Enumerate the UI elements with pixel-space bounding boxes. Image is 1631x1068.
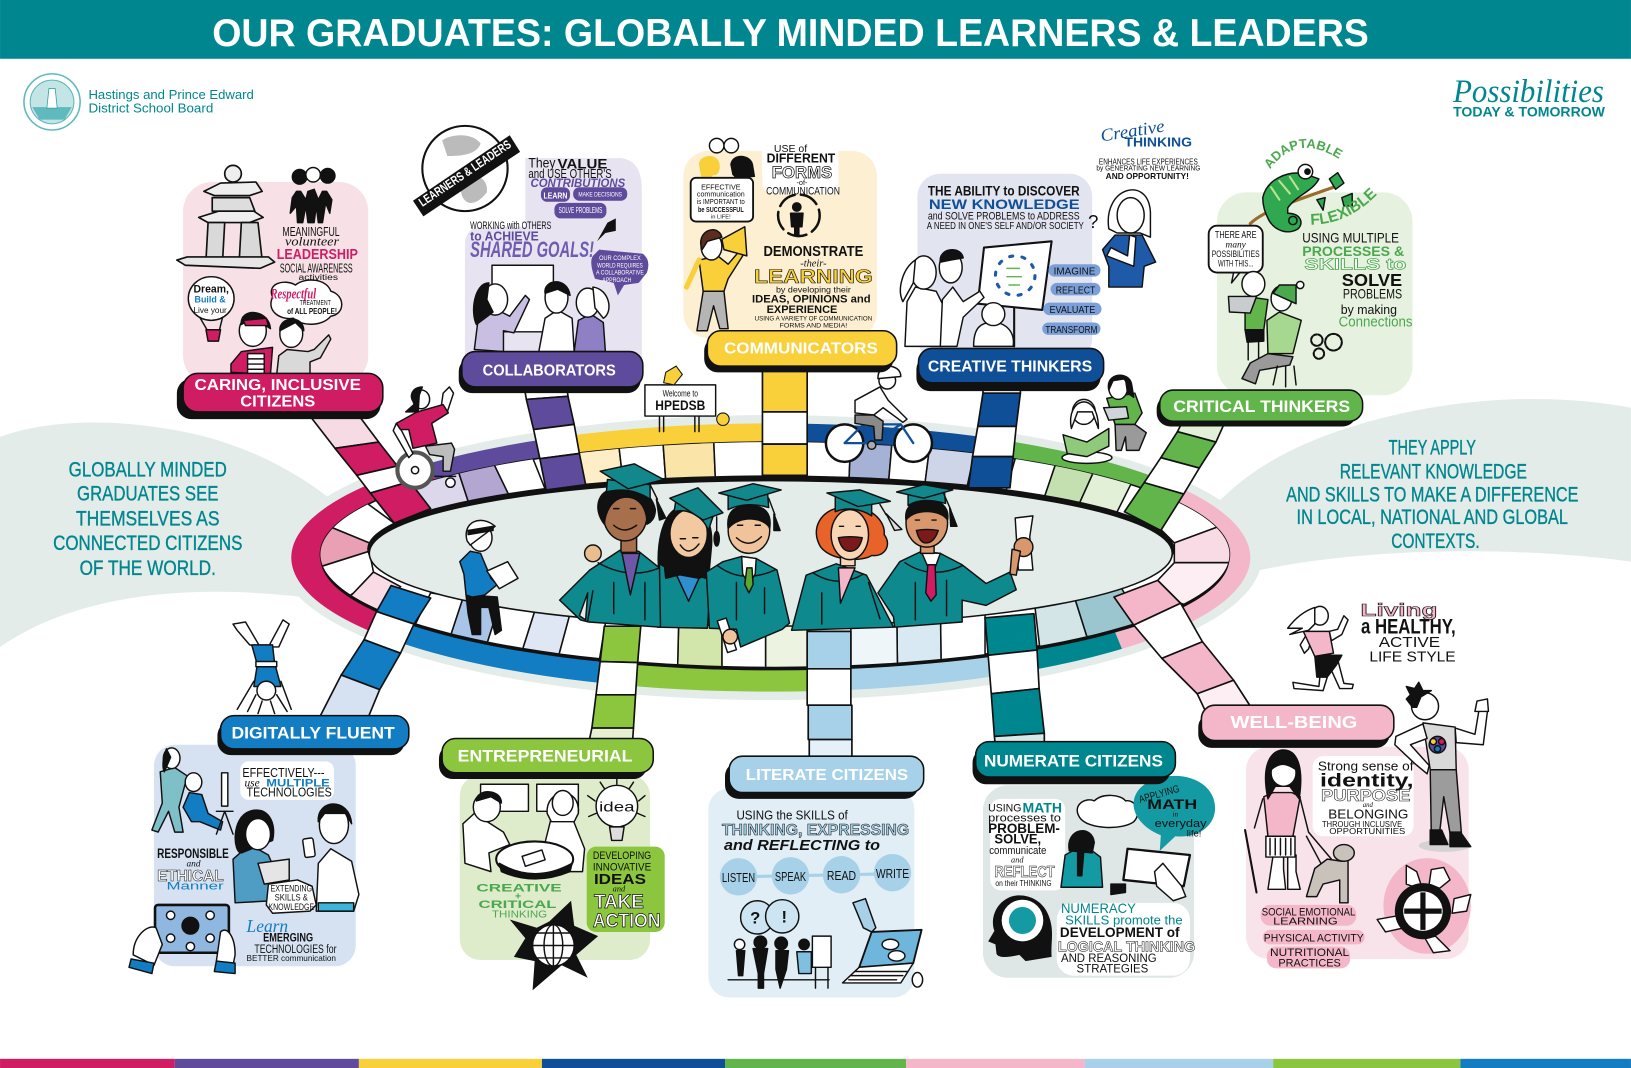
text: multiple technologies: use [244, 777, 260, 789]
pills: learn decisions solve [541, 187, 627, 218]
text: creative thinking [1096, 116, 1201, 181]
icon: idea light bulb [588, 778, 645, 840]
illustration: teacher and student at computer [152, 748, 233, 834]
callout: many possibilities [1209, 226, 1263, 283]
icon: venn question exclamation [741, 900, 799, 934]
text: demonstrate learning: by developing their [776, 284, 851, 294]
text: responsible ethical: and [186, 859, 201, 869]
text: multiple processes: PROCESSES & [1302, 244, 1404, 259]
callout: complex world: WORLD REQUIRES [597, 262, 643, 269]
label: well-being: WELL-BEING [1231, 712, 1357, 732]
label: well-being [1198, 705, 1394, 748]
character: welcome sign [645, 366, 729, 432]
icon: head with brain [988, 895, 1052, 961]
illustration: boy with phone [303, 804, 359, 911]
text: ability to discover: THE ABILITY to DISCOVER [928, 183, 1080, 199]
icon: dream balloon [188, 277, 234, 341]
text: adaptable flexible [1265, 138, 1377, 225]
text: using math: on their THINKING [995, 879, 1052, 888]
text: shared goals: to ACHIEVE [470, 228, 539, 243]
graduates group [560, 464, 1033, 653]
text: identity purpose belonging: identity, [1320, 769, 1414, 790]
label: critical thinkers: CRITICAL THINKERS [1173, 397, 1350, 416]
callout: extending skills: EXTENDING [270, 883, 312, 893]
graduate 1: curly hair [560, 464, 666, 627]
panel: creative thinkers [900, 174, 1102, 361]
text: identity purpose belonging [1318, 759, 1414, 836]
label: digitally fluent: DIGITALLY FLUENT [231, 723, 395, 742]
chain: listen speak read write [720, 854, 911, 896]
callout: applying math: everyday [1155, 818, 1207, 830]
text: they apply relevant knowledge [1286, 437, 1578, 553]
illustration: girl with cane and guide dog [1245, 750, 1354, 903]
text: emerging technologies: BETTER communication [247, 953, 336, 963]
box: developing innovative ideas take action: INNOVATIVE [593, 862, 651, 874]
text: numeracy skills: LOGICAL THINKING [1058, 940, 1195, 956]
game board ring [291, 415, 1260, 700]
text: value contributions [528, 155, 625, 190]
character: kid with laptop [460, 520, 518, 634]
text: creative thinking: Creative [1099, 116, 1166, 145]
label: digitally fluent [217, 716, 409, 755]
text: demonstrate learning: EXPERIENCE [767, 304, 838, 316]
label: communicators: COMMUNICATORS [724, 340, 878, 358]
spoke: collaborators [524, 387, 586, 490]
text: multiple processes: Connections [1339, 315, 1413, 331]
text: different forms [766, 144, 840, 198]
illustration: two kids [231, 313, 331, 374]
graduate 2: long black hair [657, 488, 723, 628]
text: using math: processes to [988, 813, 1061, 825]
chain: listen speak read write: SPEAK [775, 870, 807, 884]
callout: many possibilities: many [1226, 241, 1247, 251]
panel: caring, inclusive citizens [177, 165, 368, 385]
icon: globe with banner: LEARNERS & LEADERS [416, 137, 514, 209]
text: responsible ethical [157, 846, 229, 892]
panel: communicators [683, 138, 877, 338]
callout: effective communication: in LIFE! [711, 214, 731, 220]
pills: learn decisions solve: MAKE DECISIONS [578, 192, 622, 199]
label: literate citizens: LITERATE CITIZENS [746, 766, 908, 784]
text: they apply relevant knowledge: THEY APPLY [1389, 437, 1476, 460]
icon: inukshuk [177, 165, 275, 268]
callout: applying math: in [1173, 810, 1179, 818]
spoke: literate [807, 631, 852, 758]
callout: many possibilities: WITH THIS... [1218, 258, 1253, 268]
text: identity purpose belonging: OPPORTUNITIES [1329, 826, 1406, 836]
pills: learn decisions solve: SOLVE PROBLEMS [559, 205, 603, 215]
text: multiple processes: PROBLEMS [1343, 287, 1402, 302]
logo: possibilities: Possibilities [1452, 73, 1604, 109]
text: creative and critical thinking: THINKING [492, 909, 547, 920]
label: caring, inclusive citizens: CITIZENS [240, 393, 315, 411]
callout: applying math [1134, 776, 1215, 851]
label: numerate citizens [973, 742, 1175, 784]
callout: effective communication: communication [697, 190, 745, 199]
text: globally minded graduates [53, 458, 242, 580]
icon: dream balloon: Build & [195, 295, 226, 305]
pills: social physical nutrition: PHYSICAL ACTIVITY [1264, 932, 1364, 944]
panel: critical thinkers [1208, 138, 1413, 396]
callout: extending skills: SKILLS & [275, 893, 308, 903]
text: living a healthy active lifestyle: LIFE STYLE [1369, 650, 1456, 666]
text: creative and critical thinking: + [515, 892, 521, 903]
text: demonstrate learning [752, 244, 873, 330]
icon: person in cycle arrows [778, 195, 820, 236]
text: using math: MATH [1022, 800, 1062, 815]
callout: effective communication: is IMPORTANT to [697, 197, 745, 206]
text: different forms: -of- [797, 178, 808, 187]
pills: social physical nutrition: NUTRITIONAL [1270, 947, 1349, 959]
text: different forms: COMMUNICATION [766, 186, 840, 198]
icon: dream balloon: Dream, [194, 283, 229, 295]
text: they apply relevant knowledge: RELEVANT KNOWLEDGE [1340, 460, 1527, 483]
label: creative thinkers [916, 348, 1104, 391]
spoke: creative thinkers [968, 385, 1020, 488]
text: thinking expressing reflecting: and REFLECTING to [724, 838, 880, 854]
text: demonstrate learning: LEARNING [754, 266, 873, 288]
spoke: entrepreneurial [589, 626, 641, 743]
text: value contributions: and USE OTHER'S [528, 167, 612, 181]
icon: dream balloon: Live your [194, 305, 227, 315]
text: creative thinking: AND OPPORTUNITY! [1106, 171, 1189, 181]
pills: imagine reflect evaluate transform: IMAGINE [1054, 267, 1096, 278]
callout: respectful treatment: of ALL PEOPLE! [287, 306, 337, 316]
text: they apply relevant knowledge: CONTEXTS. [1391, 530, 1480, 553]
character: wheelchair user [393, 387, 456, 488]
text: globally minded graduates: CONNECTED CITIZENS [53, 532, 242, 555]
text: adaptable flexible: ADAPTABLE [1265, 138, 1343, 169]
illustration: woman and tablet [1061, 831, 1190, 901]
text: identity purpose belonging: THROUGH INCLUSIVE [1322, 819, 1403, 829]
pills: imagine reflect evaluate transform: EVALUATE [1050, 305, 1096, 316]
icon: pencil [853, 899, 876, 932]
illustration: girl with tablet [233, 810, 289, 903]
callout: many possibilities: POSSIBILITIES [1212, 249, 1260, 259]
pills: imagine reflect evaluate transform: REFLECT [1056, 285, 1095, 296]
icon: starburst globe [510, 901, 598, 990]
text: numeracy skills: AND REASONING [1061, 951, 1157, 965]
panel: entrepreneurial [460, 775, 665, 990]
text: globally minded graduates: GRADUATES SEE [77, 482, 218, 505]
logo: school board: Hastings and Prince Edward [88, 88, 254, 102]
text: creative and critical thinking [476, 882, 562, 920]
label: communicators [704, 331, 897, 372]
label: collaborators [459, 352, 643, 393]
spoke: numerate [985, 614, 1044, 747]
icon: turtle [1377, 858, 1471, 954]
spoke: caring [310, 413, 431, 523]
text: using math: and [1011, 855, 1024, 864]
icon: three people speech [290, 167, 335, 223]
illustration: people with flipchart [728, 936, 831, 988]
text: value contributions: CONTRIBUTIONS [531, 176, 625, 190]
character: reading kids [1062, 375, 1146, 463]
text: using math: SOLVE, [994, 832, 1041, 847]
background blob left [0, 423, 343, 647]
text: multiple technologies: TECHNOLOGIES [247, 785, 332, 800]
text: using math: communicate [989, 845, 1046, 857]
illustration: team at whiteboard [474, 265, 609, 352]
text: volunteer leadership: SOCIAL AWARENESS [280, 262, 353, 276]
callout: applying math: MATH [1147, 797, 1197, 812]
text: multiple technologies: MULTIPLE [266, 777, 330, 789]
text: volunteer leadership: LEADERSHIP [277, 247, 358, 263]
callout: complex world: A COLLABORATIVE [596, 270, 644, 277]
text: thinking expressing reflecting: USING the SKILLS of [736, 809, 848, 823]
text: responsible ethical: Manner [166, 880, 224, 892]
spoke: critical thinkers [1124, 421, 1225, 530]
text: ability to discover: NEW KNOWLEDGE [929, 197, 1080, 212]
text: adaptable flexible: FLEXIBLE [1311, 187, 1377, 225]
title banner [0, 0, 1631, 59]
character: handstand kid [233, 620, 291, 714]
callout: effective communication: EFFECTIVE [701, 182, 741, 191]
text: emerging technologies: EMERGING [263, 930, 313, 944]
icon: laptop [843, 930, 923, 987]
graduate 3: green tie and diploma [706, 484, 789, 653]
logo: school board: District School Board [88, 101, 213, 115]
text: multiple technologies: EFFECTIVELY--- [242, 765, 325, 780]
box: developing innovative ideas take action: DEVELOPING [593, 850, 651, 862]
illustration: easel and team [900, 241, 1052, 346]
text: multiple processes: by making [1341, 303, 1397, 317]
panel: digitally fluent [129, 745, 359, 974]
text: multiple technologies [242, 765, 332, 800]
label: numerate citizens: NUMERATE CITIZENS [984, 752, 1163, 771]
text: creative thinking: by GENERATING NEW LEARNING [1096, 164, 1201, 173]
text: multiple processes: SKILLS to [1304, 256, 1406, 273]
text: different forms: FORMS [772, 163, 832, 182]
character: welcome sign: HPEDSB [655, 398, 705, 413]
text: multiple processes: USING MULTIPLE [1302, 229, 1399, 245]
text: numeracy skills: NUMERACY [1061, 901, 1136, 916]
text: creative thinking: ENHANCES LIFE EXPERIENCES [1099, 157, 1198, 166]
callout: extending skills: KNOWLEDGE [268, 902, 314, 912]
illustration: two students [1228, 271, 1304, 387]
text: living a healthy active lifestyle [1361, 600, 1456, 666]
text: thinking expressing reflecting: THINKING, EXPRESSING [722, 822, 909, 839]
text: creative and critical thinking: CREATIVE [476, 882, 562, 894]
text: value contributions: They [528, 155, 556, 170]
text: numeracy skills: STRATEGIES [1077, 962, 1148, 976]
character: runner [1288, 606, 1353, 691]
logo: possibilities: TODAY & TOMORROW [1453, 103, 1606, 119]
pills: social physical nutrition: PRACTICES [1278, 957, 1341, 969]
text: numeracy skills: SKILLS promote the [1065, 913, 1183, 928]
panel: collaborators [413, 126, 648, 359]
text: demonstrate learning: -their- [800, 258, 827, 269]
pills: social physical nutrition: LEARNING [1273, 917, 1338, 928]
text: creative and critical thinking: CRITICAL [478, 899, 557, 911]
spoke: well-being [1114, 580, 1252, 711]
text: value contributions: VALUE [558, 157, 607, 172]
icon: venn question exclamation: ? [750, 909, 760, 928]
text: shared goals: SHARED GOALS! [470, 237, 594, 262]
text: emerging technologies [246, 916, 337, 963]
callout: applying math: APPLYING [1138, 784, 1181, 806]
text: globally minded graduates: GLOBALLY MINDED [69, 458, 227, 481]
box: developing innovative ideas take action: and [613, 884, 626, 893]
character: welcome sign: Welcome to [663, 388, 698, 398]
text: identity purpose belonging: Strong sense of [1318, 759, 1414, 774]
icon: shooting star [597, 218, 616, 241]
icon: idea light bulb: idea [599, 799, 635, 814]
callout: applying math: life! [1187, 828, 1201, 838]
illustration: thinking woman [1103, 190, 1156, 287]
illustration: waving boy [1395, 682, 1488, 852]
character: cyclist [826, 366, 932, 462]
pills: social physical nutrition [1261, 905, 1365, 969]
panel: literate citizens [708, 788, 923, 997]
icon: venn question exclamation: ! [782, 908, 787, 927]
text: globally minded graduates: THEMSELVES AS [76, 507, 220, 530]
text: demonstrate learning: FORMS AND MEDIA! [780, 323, 848, 330]
panel: well-being [1245, 682, 1488, 969]
text: ability to discover: and SOLVE PROBLEMS to ADDRESS [928, 210, 1080, 222]
callout: many possibilities: THERE ARE [1215, 230, 1257, 241]
spoke: digitally fluent [318, 586, 431, 720]
panel: numerate citizens [983, 776, 1215, 978]
text: identity purpose belonging: PURPOSE [1321, 786, 1410, 805]
text: demonstrate learning: IDEAS, OPINIONS and [752, 294, 871, 306]
title banner: OUR GRADUATES: GLOBALLY MINDED LEARNERS & LEADERS [212, 12, 1369, 55]
callout: complex world: OUR COMPLEX [599, 255, 642, 262]
callout: extending skills [266, 880, 316, 913]
icon: chameleon [1250, 164, 1352, 232]
text: ability to discover: A NEED IN ONE'S SELF AND/OR SOCIETY [927, 221, 1084, 232]
text: volunteer leadership: volunteer [285, 234, 339, 248]
pills: imagine reflect evaluate transform [1042, 264, 1102, 336]
callout: respectful treatment: Respectful [270, 287, 317, 303]
pills: imagine reflect evaluate transform: TRANSFORM [1045, 325, 1097, 336]
text: globally minded graduates: OF THE WORLD. [80, 557, 216, 580]
callout: effective communication: be SUCCESSFUL [698, 205, 744, 214]
label: collaborators: COLLABORATORS [483, 361, 616, 379]
label: entrepreneurial: ENTREPRENEURIAL [458, 746, 632, 765]
text: using math: USING [988, 802, 1021, 814]
logo: school board [24, 74, 254, 130]
box: developing innovative ideas take action: TAKE [594, 891, 644, 913]
graduate 5: raising diploma [878, 485, 1033, 627]
background blob right [1207, 399, 1631, 575]
text: living a healthy active lifestyle: ACTIVE [1379, 635, 1440, 651]
callout: respectful treatment: TREATMENT [300, 298, 331, 307]
chain: listen speak read write: WRITE [876, 867, 909, 881]
text: using math: REFLECT [994, 864, 1055, 881]
label: literate citizens [725, 756, 924, 799]
spoke: communicators [762, 364, 807, 475]
text: volunteer leadership: activities [299, 273, 338, 282]
icon: tablet network [129, 905, 235, 974]
text: ability to discover [927, 183, 1098, 232]
icon: two heads [699, 138, 755, 181]
label: caring, inclusive citizens: CARING, INCLUSIVE [195, 376, 361, 394]
text: emerging technologies: Learn [246, 916, 288, 936]
pills: social physical nutrition: SOCIAL EMOTIONAL [1262, 906, 1355, 918]
box: developing innovative ideas take action [587, 847, 665, 932]
text: emerging technologies: TECHNOLOGIES for [254, 942, 337, 956]
text: shared goals [470, 220, 594, 262]
box: developing innovative ideas take action: IDEAS [594, 872, 646, 888]
text: numeracy skills: DEVELOPMENT of [1060, 924, 1180, 940]
label: creative thinkers: CREATIVE THINKERS [928, 357, 1092, 375]
text: demonstrate learning: USING A VARIETY OF COMMUNICATION [755, 315, 872, 322]
text: different forms: USE of [774, 144, 807, 155]
text: identity purpose belonging: and [1363, 802, 1373, 809]
label: caring, inclusive citizens [177, 373, 383, 419]
illustration: woman with megaphone [687, 227, 747, 331]
pills: learn decisions solve: LEARN [544, 191, 567, 201]
text: thinking expressing reflecting [722, 809, 909, 854]
callout: complex world: APPROACH [602, 277, 631, 284]
text: different forms: DIFFERENT [767, 151, 836, 165]
text: identity purpose belonging: BELONGING [1328, 808, 1408, 822]
text: living a healthy active lifestyle: a HEALTHY, [1361, 615, 1456, 638]
text: responsible ethical: RESPONSIBLE [157, 846, 229, 861]
text: living a healthy active lifestyle: Living [1361, 600, 1437, 620]
text: using math [988, 800, 1062, 888]
text: volunteer leadership [277, 225, 358, 282]
text: creative thinking: THINKING [1124, 136, 1192, 150]
callout: respectful treatment [270, 280, 342, 324]
bottom colour stripe [0, 1059, 1631, 1068]
callout: effective communication [691, 178, 753, 222]
label: critical thinkers [1157, 390, 1363, 426]
chain: listen speak read write: LISTEN [722, 871, 755, 885]
text: using math: PROBLEM- [988, 821, 1060, 836]
icon: thought cloud [1077, 795, 1138, 827]
box: developing innovative ideas take action: ACTION [593, 910, 661, 932]
text: volunteer leadership: MEANINGFUL [282, 225, 340, 239]
icon: globe with banner [413, 126, 520, 216]
graduate 4: red curly hair [792, 490, 902, 630]
illustration: two people at table [463, 784, 585, 879]
text: numeracy skills [1058, 901, 1195, 976]
text: demonstrate learning: DEMONSTRATE [763, 244, 864, 260]
text: multiple processes: SOLVE [1342, 270, 1402, 290]
text: ability to discover: ? [1088, 211, 1098, 232]
label: entrepreneurial [439, 738, 653, 779]
text: responsible ethical: ETHICAL [157, 868, 224, 885]
icon: gears [1311, 334, 1342, 359]
chain: listen speak read write: READ [827, 869, 856, 883]
board path spokes [310, 364, 1252, 758]
text: multiple processes [1302, 229, 1413, 331]
text: shared goals: WORKING with OTHERS [470, 220, 552, 232]
callout: complex world [591, 250, 648, 295]
